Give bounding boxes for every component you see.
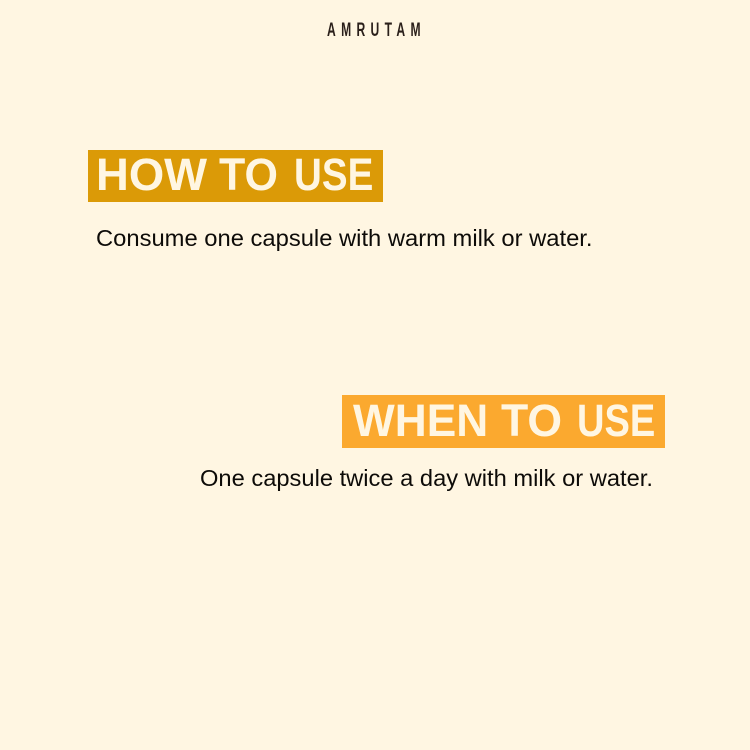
heading: when to use: TO: [501, 395, 562, 446]
heading: how to use: USE: [294, 149, 373, 200]
heading: how to use: HOW: [96, 149, 207, 200]
heading: how to use: [88, 150, 383, 202]
heading: when to use: [342, 395, 665, 448]
heading: when to use: USE: [577, 395, 656, 446]
text: how to use instructions: Consume one capsule with warm milk or water.: [96, 225, 593, 251]
heading: when to use: WHEN: [353, 395, 488, 446]
brand title: AMRUTAM: [327, 19, 426, 41]
text: when to use instructions: One capsule twice a day with milk or water.: [200, 465, 653, 491]
heading: how to use: TO: [219, 149, 278, 200]
